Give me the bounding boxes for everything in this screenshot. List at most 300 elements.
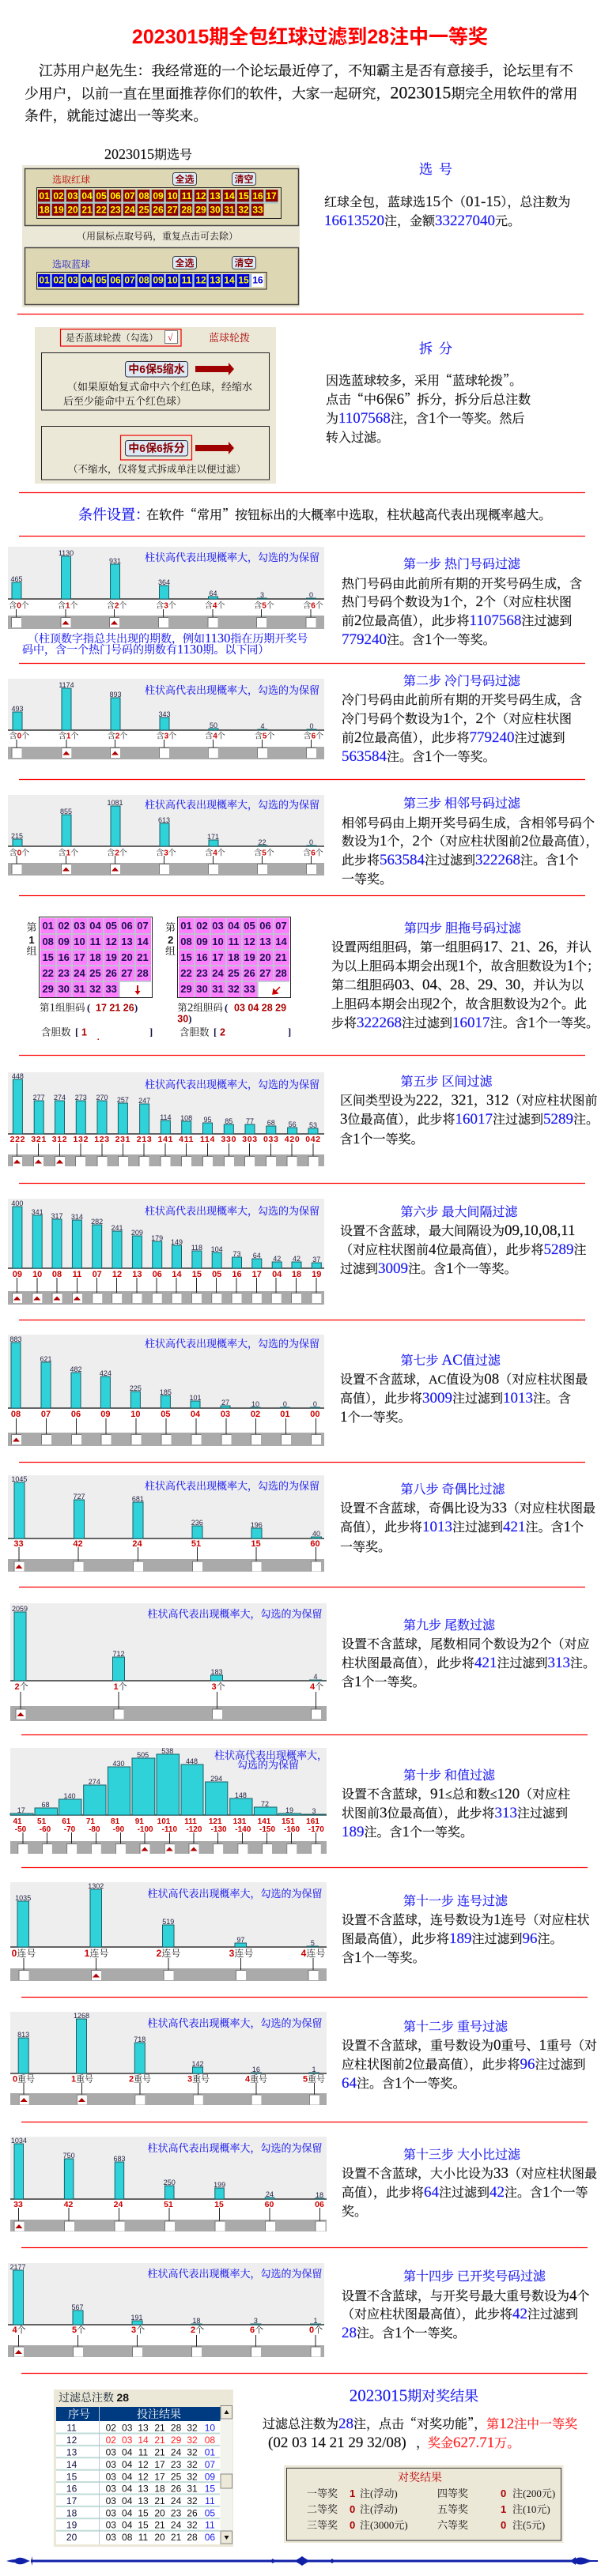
checkboxes (11, 856, 316, 874)
category labels: 1连号 (85, 1948, 108, 1959)
category labels: 00 (310, 1410, 320, 1419)
value labels: 465 (10, 575, 23, 583)
table rows: 13 (66, 2446, 77, 2457)
category labels: 含4个 (205, 730, 225, 741)
category labels: 02 (251, 1410, 260, 1419)
category labels: 101 (157, 1817, 171, 1826)
table rows: 12 (138, 2459, 149, 2470)
red ball selector: 08 (138, 190, 149, 201)
step 4 text: 第二组胆码03、04、28、29、30，并认为以 (331, 977, 584, 993)
value labels: 101 (189, 1394, 202, 1402)
category labels: 0连号 (12, 1948, 36, 1959)
category labels: 15 (192, 1270, 202, 1279)
group 2 grid: 26 (244, 967, 255, 979)
prize rows: 注(200元) (512, 2487, 555, 2499)
red ball selector: 05 (96, 190, 107, 201)
value labels: 813 (17, 2031, 29, 2039)
value labels: 68 (41, 1801, 50, 1809)
group 1 grid (27, 917, 152, 997)
prize rows: 注(3000元) (360, 2519, 408, 2531)
category labels: 4连号 (301, 1948, 325, 1959)
category labels: 含6个 (303, 601, 323, 610)
value labels: 0 (309, 722, 314, 730)
bars (13, 1079, 318, 1134)
category labels: 231 (115, 1135, 130, 1144)
blue ball rotation option: √ (168, 332, 173, 343)
intro text: 江苏用户赵先生：我经常逛的一个论坛最近停了，不知霸主是否有意接手，论坛里有不 (39, 63, 573, 79)
category labels: 含6个 (304, 730, 323, 741)
value labels (10, 549, 313, 599)
category labels: 08 (52, 1270, 62, 1279)
prize rows: 注(5元) (512, 2519, 545, 2531)
step 1 text: 第一步 热门号码过滤 (403, 557, 521, 571)
value labels: 273 (75, 1094, 87, 1102)
condition settings note: 条件设置： (78, 507, 149, 523)
group 2 grid: 09 (196, 936, 208, 947)
group 1 grid: 18 (89, 951, 101, 963)
table rows: 15 (205, 2483, 215, 2494)
category labels: 0个 (309, 2325, 323, 2335)
value labels: 931 (109, 557, 121, 565)
prize rows: 二等奖 (307, 2503, 338, 2515)
category labels: 1个 (113, 1682, 127, 1692)
chart: step 3 adjacent numbers (8, 795, 324, 876)
table rows: 20 (66, 2532, 77, 2543)
panel: filter result table (54, 2390, 233, 2547)
value labels: 50 (210, 721, 217, 729)
value labels: 149 (171, 1238, 183, 1246)
chart caption: 码中，含一个热门号码的期数有1130期。以下同） (22, 642, 269, 657)
blue ball selector: 08 (138, 275, 149, 286)
red ball selector: 14 (224, 190, 235, 201)
red ball selector: 11 (182, 190, 192, 201)
option box: shrink: （如果原始复式命中六个红色球，经缩水 (67, 381, 252, 394)
step 3 text: 一等奖。 (342, 872, 392, 887)
value labels: 24 (266, 2190, 274, 2198)
group 2 grid: 13 (259, 936, 271, 947)
value labels: 17 (17, 1806, 25, 1814)
group captions: ( (87, 1002, 90, 1013)
table rows: 21 (154, 2495, 165, 2506)
option box: split: （不缩水，仅将复式拆成单注以便过滤） (68, 463, 246, 475)
group 1 grid: 07 (137, 920, 149, 932)
category labels: 18 (292, 1270, 301, 1279)
category labels: 含3个 (157, 730, 176, 741)
step 8 text: 第八步 奇偶比过滤 (400, 1482, 506, 1497)
value labels: 0 (309, 838, 313, 846)
value labels: 1130 (59, 549, 74, 557)
bars (13, 806, 316, 846)
category labels: 2个 (14, 1682, 28, 1692)
red ball selector: 04 (81, 190, 93, 201)
category labels: -160 (284, 1825, 300, 1834)
value labels: 750 (63, 2152, 75, 2160)
chart note: 柱状高代表出现概率大，勾选的为保留 (147, 2017, 323, 2030)
blue ball selector: 选取蓝球 (52, 258, 90, 270)
table rows: 18 (154, 2483, 165, 2494)
category labels: -70 (64, 1825, 76, 1834)
table rows: 16 (66, 2483, 77, 2494)
value labels: 140 (63, 1792, 76, 1800)
category labels: 含6个 (303, 847, 323, 858)
value labels: 0 (309, 591, 313, 599)
category labels: 01 (280, 1410, 290, 1419)
step 9 text: 含1个一等奖。 (342, 1674, 425, 1690)
step 12 text (342, 2020, 597, 2092)
step 7 text (340, 1352, 588, 1425)
category labels: 81 (111, 1817, 120, 1826)
step 5 text: 区间类型设为222，321，312（对应柱状图前 (340, 1092, 598, 1109)
value labels (12, 1605, 318, 1681)
group 1 grid: 10 (74, 936, 85, 947)
group 1 grid: 04 (89, 920, 101, 932)
checkboxes (19, 2083, 319, 2105)
table rows: 04 (122, 2483, 133, 2494)
step 9 text: 设置不含蓝球，尾数相同个数设为2个（对应 (342, 1636, 590, 1652)
group captions: 17 21 26 (96, 1002, 134, 1013)
blue ball selector: 12 (195, 275, 206, 286)
category labels: -120 (186, 1825, 202, 1834)
step 3 text: 此步将563584注过滤到322268注。含1个 (342, 852, 579, 868)
results text: (02 03 14 21 29 32/08) (268, 2435, 406, 2451)
panel: split settings (35, 327, 276, 484)
table rows: 28 (171, 2423, 182, 2434)
step 4 text: 设置两组胆码，第一组胆码17、21、26，并认 (331, 939, 592, 955)
table rows: 03 (106, 2519, 116, 2530)
category labels: 05 (161, 1410, 171, 1419)
step 2 text (342, 674, 582, 765)
step 1 text (342, 557, 582, 648)
value labels: 400 (11, 1199, 23, 1207)
group 2 grid: 27 (259, 967, 271, 979)
group captions: 1 (81, 1027, 87, 1038)
step 10 text (342, 1768, 570, 1840)
group 1 grid: 30 (58, 983, 70, 995)
value labels: 712 (112, 1650, 125, 1658)
selector background (22, 165, 300, 307)
bars (13, 688, 316, 730)
group 1 grid: 31 (74, 983, 85, 995)
table rows: 32 (187, 2459, 198, 2470)
prize box title: 对奖结果 (398, 2471, 442, 2484)
group 2 grid: 16 (196, 951, 208, 963)
category labels: 33 (13, 1539, 24, 1549)
category labels: 3连号 (229, 1948, 253, 1959)
category labels: -170 (308, 1825, 324, 1834)
value labels: 505 (137, 1751, 149, 1759)
blue ball selector (25, 248, 299, 305)
step 13 text: 高值），此步将64注过滤到42注。含1个一等 (342, 2184, 588, 2201)
icon: down arrow (134, 985, 141, 995)
category labels: 41 (13, 1817, 22, 1826)
step 7 text: 设置不含蓝球，AC值设为08（对应柱状图最 (340, 1371, 588, 1388)
category labels: 121 (209, 1817, 222, 1826)
table rows: 19 (66, 2519, 77, 2530)
category labels: 含2个 (107, 601, 127, 610)
value labels (17, 1747, 316, 1815)
category labels: 6个 (250, 2325, 263, 2335)
scrollbar (220, 2405, 232, 2544)
category labels: -100 (138, 1825, 153, 1834)
category labels (9, 730, 323, 741)
value labels: 4 (313, 1673, 318, 1681)
category labels: -60 (40, 1825, 51, 1834)
value labels: 3 (260, 591, 264, 599)
red ball selector: 02 (53, 190, 64, 201)
table rows: 26 (171, 2483, 182, 2494)
red ball selector: 15 (238, 190, 249, 201)
bars (17, 1889, 318, 1947)
red ball selector: 12 (195, 190, 206, 201)
step 5 text: 含1个一等奖。 (340, 1131, 424, 1147)
prize rows: 0 (350, 2519, 355, 2531)
group 2 grid: 24 (212, 967, 224, 979)
red ball selector: 27 (167, 204, 178, 215)
group 2 grid: 06 (259, 920, 271, 932)
category labels: 15 (251, 1539, 261, 1549)
category labels: 111 (184, 1817, 197, 1826)
category labels: 4个 (310, 1682, 323, 1692)
category labels: 411 (179, 1135, 194, 1144)
value labels: 53 (309, 1121, 317, 1129)
step 2 text: 冷门号码个数设为1个，2个（对应柱状图 (342, 710, 572, 727)
group 2 grid: 31 (212, 983, 224, 995)
results text: 奖金627.71万。 (428, 2435, 520, 2451)
table rows: 17 (154, 2459, 165, 2470)
table rows (66, 2423, 215, 2543)
red ball selector: 13 (210, 190, 221, 201)
red ball selector: 25 (138, 204, 149, 215)
red ball selector: 全选 (175, 173, 195, 185)
category labels: 含5个 (254, 847, 274, 858)
value labels: 270 (96, 1094, 108, 1102)
group 1 grid: 24 (74, 967, 85, 979)
category labels: 2个 (191, 2325, 204, 2335)
group 1 grid: 05 (105, 920, 117, 932)
group 2 grid (165, 917, 291, 997)
blue ball selector: 全选 (175, 257, 195, 269)
category labels: 5个 (72, 2325, 85, 2335)
table rows: 11 (205, 2495, 215, 2506)
step 2 text: 第二步 冷门号码过滤 (403, 674, 521, 688)
results text: 过滤总注数为28注，点击“对奖功能”，第12注中一等奖 (263, 2414, 577, 2432)
table rows: 03 (106, 2495, 116, 2506)
category labels: 33 (13, 2200, 23, 2209)
chart: step 2 cold numbers (8, 679, 324, 759)
red ball selector: 22 (96, 204, 107, 215)
blue ball selector: 07 (124, 275, 135, 286)
category labels: 42 (73, 1539, 83, 1549)
selector hint: （用鼠标点取号码，重复点击可去除） (77, 230, 238, 242)
category labels: 151 (282, 1817, 295, 1826)
bars (18, 2019, 319, 2073)
step 5 text (340, 1075, 599, 1147)
group 1 grid: 22 (42, 967, 54, 979)
prize rows: 0 (501, 2487, 506, 2499)
category labels: 17 (252, 1270, 262, 1279)
red ball selector: 30 (210, 204, 221, 215)
step 12 text: 第十二步 重号过滤 (403, 2020, 508, 2034)
condition settings note: 在软件“常用”按钮标出的大概率中选取，柱状越高代表出现概率越大。 (146, 505, 551, 523)
category labels: 03 (221, 1410, 230, 1419)
category labels: 15 (214, 2200, 224, 2209)
group 1 grid: 13 (121, 936, 133, 947)
step 5 text: 3位最高值），此步将16017注过滤到5289注。 (340, 1111, 599, 1128)
value labels: 40 (312, 1530, 320, 1538)
intro text (25, 63, 577, 123)
text: split: 为1107568注，含1个一等奖。然后 (326, 410, 524, 427)
group 2 grid: 19 (244, 951, 255, 963)
heading: number selection: 选号 (419, 162, 452, 177)
table rows: 26 (187, 2508, 198, 2519)
value labels: 883 (9, 1335, 22, 1343)
category labels (12, 1948, 325, 1959)
value labels: 236 (191, 1519, 203, 1527)
category labels: 161 (306, 1817, 319, 1826)
value labels: 613 (158, 816, 170, 824)
group 2 grid: 33 (244, 983, 255, 995)
category labels: 321 (31, 1135, 47, 1144)
value labels: 97 (236, 1936, 244, 1944)
step 6 text: 第六步 最大间隔过滤 (400, 1205, 519, 1219)
category labels: 06 (71, 1410, 81, 1419)
table rows: 21 (154, 2423, 165, 2434)
prize rows: 注(浮动) (360, 2503, 398, 2515)
category labels: 1重号 (71, 2073, 93, 2085)
checkboxes (13, 2335, 321, 2356)
step 12 text: 应柱状图前2位最高值），此步将96注过滤到 (342, 2056, 586, 2073)
group 1 grid: 14 (137, 936, 149, 947)
table rows: 12 (138, 2472, 149, 2483)
value labels (11, 1475, 320, 1538)
table rows: 08 (205, 2435, 215, 2446)
value labels: 72 (261, 1800, 269, 1808)
category labels: 10 (32, 1270, 42, 1279)
group 2 grid: 10 (212, 936, 224, 947)
chart note: 柱状高代表出现概率大，勾选的为保留 (145, 684, 319, 697)
checkboxes (12, 1278, 321, 1303)
chart note: 柱状高代表出现概率大，勾选的为保留 (145, 1079, 319, 1091)
value labels: 282 (91, 1218, 103, 1226)
value labels: 85 (225, 1117, 232, 1125)
chart: step 11 consecutive numbers (10, 1882, 327, 1981)
category labels: 4重号 (245, 2073, 267, 2085)
category labels: 14 (172, 1270, 182, 1279)
table rows: 32 (187, 2423, 198, 2434)
group 2 grid: 18 (228, 951, 240, 963)
group captions: 30) (177, 1013, 191, 1024)
group 2 grid: 23 (196, 967, 208, 979)
category labels: 141 (258, 1817, 271, 1826)
step 6 text: 过滤到3009注。含1个一等奖。 (340, 1260, 517, 1277)
value labels: 1 (313, 2317, 318, 2325)
bars (13, 1207, 321, 1268)
step 14 text (342, 2269, 590, 2341)
bars (14, 2144, 324, 2199)
checkboxes (11, 740, 316, 758)
value labels: 4 (260, 722, 265, 730)
value labels: 538 (161, 1747, 173, 1755)
value labels: 77 (246, 1117, 254, 1125)
group 1 grid: 08 (42, 936, 54, 947)
chart: step 13 big small ratio (10, 2137, 327, 2231)
table rows: 15 (66, 2472, 77, 2483)
category labels: 06 (153, 1270, 162, 1279)
value labels: 42 (293, 1255, 300, 1263)
category labels: 10 (130, 1410, 141, 1419)
bars (10, 1754, 326, 1815)
category labels: 13 (132, 1270, 142, 1279)
step 14 text: 设置不含蓝球，与开奖号最大重号数设为4个 (342, 2288, 590, 2304)
table rows: 24 (171, 2495, 182, 2506)
table rows: 03 (106, 2472, 116, 2483)
red ball selector: 23 (110, 204, 121, 215)
value labels: 448 (186, 1757, 198, 1765)
blue ball selector: 01 (39, 275, 50, 286)
step 10 text: 状图前3位最高值），此步将313注过滤到 (342, 1805, 568, 1821)
results text: ， (416, 2437, 429, 2450)
value labels: 567 (71, 2303, 84, 2311)
table rows: 23 (171, 2459, 182, 2470)
value labels: 148 (235, 1791, 247, 1799)
category labels: 420 (285, 1135, 300, 1144)
red ball selector: 07 (124, 190, 135, 201)
category labels: 05 (212, 1270, 221, 1279)
step 4 text: 上胆码本期会出现2个，故含胆数设为2个。此 (331, 996, 587, 1012)
category labels: 2重号 (129, 2073, 151, 2085)
category labels: 含1个 (58, 601, 77, 610)
step 14 text: （对应柱状图最高值），此步将42注过滤到 (342, 2306, 578, 2322)
value labels (11, 2137, 323, 2199)
category labels: -140 (235, 1825, 251, 1834)
text: split: 点击“中6保6”拆分，拆分后总注数 (326, 390, 531, 408)
option box: split: 中6保6拆分 (128, 442, 185, 454)
value labels: 448 (12, 1072, 24, 1080)
value labels: 1268 (74, 2012, 89, 2020)
chart note: 柱状高代表出现概率大，勾选的为保留 (145, 552, 319, 564)
category labels: 51 (191, 1539, 201, 1549)
group 1 grid: 23 (58, 967, 70, 979)
red ball selector: 32 (238, 204, 249, 215)
value labels: 37 (312, 1256, 320, 1264)
group captions: ( (225, 1002, 228, 1013)
group 1 grid: 32 (89, 983, 101, 995)
value labels: 3 (312, 1807, 316, 1815)
category labels (13, 2073, 325, 2085)
value labels: 64 (209, 589, 217, 597)
table rows: 21 (154, 2519, 165, 2530)
text: number selection: 红球全包，蓝球选15个（01-15），总注数为 (324, 194, 570, 210)
category labels: 033 (263, 1135, 279, 1144)
category labels: 0重号 (13, 2073, 35, 2085)
total count: 过滤总注数 28 (59, 2391, 129, 2405)
category labels: 51 (164, 2200, 173, 2209)
category labels: 303 (242, 1135, 258, 1144)
step 8 text: 设置不含蓝球，奇偶比设为33（对应柱状图最 (340, 1500, 595, 1516)
value labels: 18 (192, 2317, 200, 2325)
table rows: 10 (205, 2423, 215, 2434)
red ball selector: 03 (67, 190, 78, 201)
value labels: 215 (11, 832, 23, 840)
category labels: 09 (100, 1410, 111, 1419)
category labels: 19 (312, 1270, 321, 1279)
group 2 grid: 15 (180, 951, 192, 963)
group 2 grid: 20 (259, 951, 271, 963)
intro text: 条件，就能过滤出一等奖来。 (25, 107, 207, 123)
category labels: 07 (41, 1410, 51, 1419)
value labels: 2059 (12, 1605, 28, 1613)
step 9 text (342, 1618, 595, 1690)
